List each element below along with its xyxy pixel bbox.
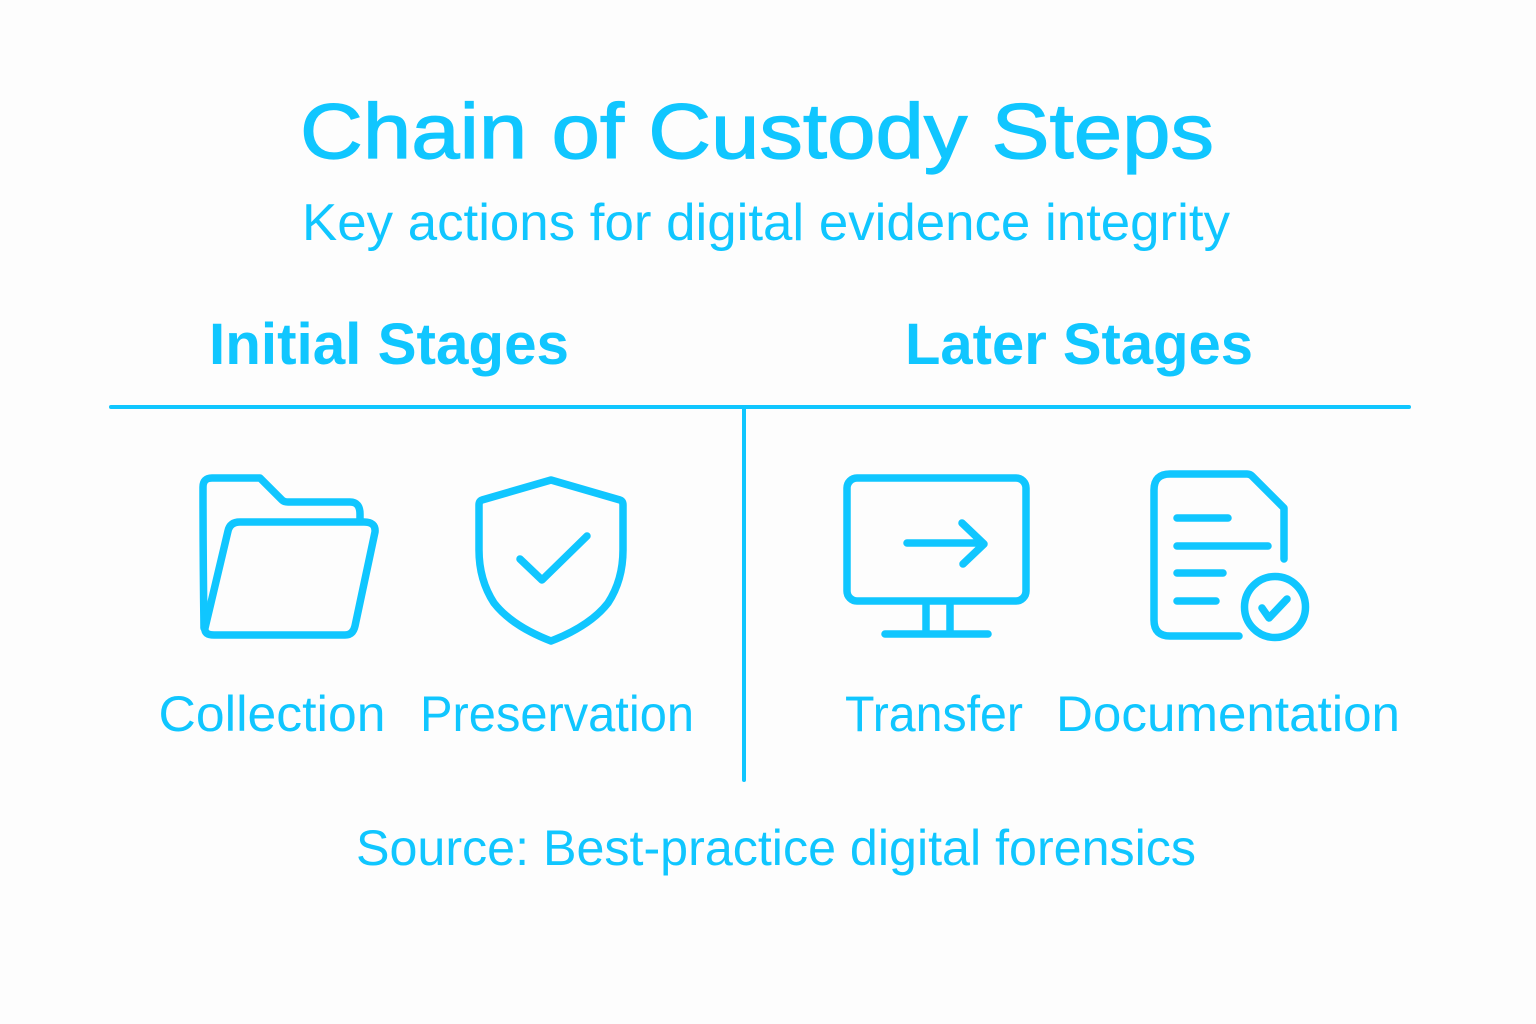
- subtitle: Key actions for digital evidence integrity: [302, 194, 1230, 252]
- source note: Source: Best-practice digital forensics: [356, 820, 1196, 876]
- horizontal divider: [111, 405, 1409, 409]
- heading: initial stages: Initial Stages: [209, 312, 569, 377]
- label: documentation: Documentation: [1056, 686, 1400, 742]
- heading: later stages: Later Stages: [905, 312, 1253, 377]
- icon: document with check badge: [1154, 474, 1306, 638]
- title: Chain of Custody Steps: [300, 87, 1214, 175]
- label: transfer: Transfer: [845, 686, 1023, 742]
- label: preservation: Preservation: [420, 686, 694, 742]
- label: collection: Collection: [158, 686, 386, 742]
- icon: shield with check: [479, 480, 623, 641]
- icon: monitor with arrow: [847, 478, 1026, 634]
- vertical divider: [742, 408, 746, 780]
- icon: folder: [203, 478, 375, 635]
